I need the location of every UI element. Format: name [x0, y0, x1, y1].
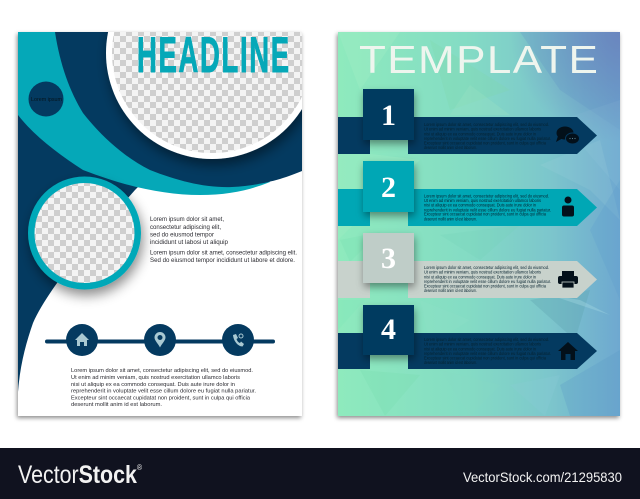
step 4 copy: Lorem ipsum dolor sit amet, consectetur adipiscing elit, sed do eiusmod.: [424, 337, 549, 342]
teal arc: [18, 32, 270, 195]
navy arc: [55, 32, 302, 187]
step 1: [338, 89, 597, 154]
step 1 copy: deserunt mollit anim id est laborum.: [424, 145, 477, 150]
step 2 copy: [424, 193, 551, 221]
text block: intro: consectetur adipiscing elit,: [150, 224, 221, 231]
text block: footer copy: reprehenderit in voluptate velit esse cillum dolore eu fugiat nulla pariatur.: [71, 388, 256, 394]
step 1 copy: [424, 122, 551, 150]
step 4 copy: Ut enim ad minim veniam, quis nostrud exercitation ullamco laboris: [424, 342, 542, 347]
step 4: 4: [381, 313, 396, 346]
icon: speech bubbles: [556, 126, 580, 144]
text block: footer copy: nisi ut aliquip ex ea commodo consequat. Duis aute irure dolor in: [71, 382, 235, 388]
step 2 copy: Ut enim ad minim veniam, quis nostrud exercitation ullamco laboris: [424, 198, 542, 203]
step 3 copy: deserunt mollit anim id est laborum.: [424, 288, 477, 293]
step 1 copy: reprehenderit in voluptate velit esse cillum dolore eu fugiat nulla pariatur.: [424, 136, 551, 141]
step 3 copy: nisi ut aliquip ex ea commodo consequat. Duis aute irure dolor in: [424, 274, 536, 279]
step 1 copy: Ut enim ad minim veniam, quis nostrud exercitation ullamco laboris: [424, 127, 542, 132]
large photo placeholder circle: [103, 32, 302, 170]
step 4 copy: deserunt mollit anim id est laborum.: [424, 360, 477, 365]
step 2 copy: nisi ut aliquip ex ea commodo consequat. Duis aute irure dolor in: [424, 203, 536, 208]
contact timeline bar: [45, 324, 275, 356]
step 3 copy: Lorem ipsum dolor sit amet, consectetur adipiscing elit, sed do eiusmod.: [424, 265, 549, 270]
text block: intro: Sed do eiusmod tempor incididunt ut labore et dolore.: [150, 257, 295, 264]
panel: left flyer page: [18, 0, 318, 416]
small navy badge: [28, 82, 64, 116]
step 1 copy: nisi ut aliquip ex ea commodo consequat. Duis aute irure dolor in: [424, 131, 536, 136]
headline: HEADLINE: [137, 26, 291, 83]
step 2 copy: Excepteur sint occaecat cupidatat non proident, sunt in culpa qui officia: [424, 212, 546, 217]
text block: footer copy: Ut enim ad minim veniam, quis nostrud exercitation ullamco laboris: [71, 375, 240, 381]
step 2 copy: reprehenderit in voluptate velit esse cillum dolore eu fugiat nulla pariatur.: [424, 207, 551, 212]
step 4 copy: reprehenderit in voluptate velit esse cillum dolore eu fugiat nulla pariatur.: [424, 351, 551, 356]
icon: person: [562, 196, 574, 216]
step 3: [338, 233, 597, 298]
stock image id: VectorStock.com/21295830: [463, 469, 622, 485]
logo wordmark: VectorStock: [18, 461, 147, 489]
step 2: 2: [381, 171, 396, 204]
small navy badge: Lorem ipsum: [31, 97, 62, 103]
text block: intro: sed do eiusmod tempor: [150, 232, 215, 238]
text block: footer copy: [71, 368, 256, 408]
step 3: 3: [381, 242, 396, 275]
step 1: 1: [381, 99, 396, 132]
panel: right template page: [338, 32, 620, 416]
text block: intro: Lorem ipsum dolor sit amet,: [150, 216, 224, 223]
step 3 copy: reprehenderit in voluptate velit esse cillum dolore eu fugiat nulla pariatur.: [424, 279, 551, 284]
icon: location pin: [144, 324, 176, 356]
step 2: [338, 161, 597, 226]
step 4 copy: [424, 337, 551, 365]
step 3 copy: Excepteur sint occaecat cupidatat non proident, sunt in culpa qui officia: [424, 284, 546, 288]
icon: home: [66, 324, 98, 356]
text block: intro: Lorem ipsum dolor sit amet, consectetur adipiscing elit.: [150, 250, 297, 256]
text block: footer copy: Lorem ipsum dolor sit amet, consectetur adipiscing elit, sed do eiusmod.: [71, 368, 253, 374]
text block: footer copy: Excepteur sint occaecat cupidatat non proident, sunt in culpa qui officia: [71, 396, 251, 402]
text block: intro: incididunt ut labosi ut aliquip: [150, 239, 228, 246]
title: template: TEMPLATE: [359, 37, 599, 81]
step 2 copy: deserunt mollit anim id est laborum.: [424, 216, 477, 221]
icon: house: [558, 342, 578, 360]
step 3 copy: Ut enim ad minim veniam, quis nostrud exercitation ullamco laboris: [424, 270, 542, 275]
step 2 copy: Lorem ipsum dolor sit amet, consectetur adipiscing elit, sed do eiusmod.: [424, 193, 549, 198]
step 3 copy: [424, 265, 551, 293]
step 4: [338, 305, 597, 369]
navy lower-left swoosh: [18, 115, 138, 392]
icon: phone: [222, 324, 254, 356]
text block: footer copy: deserunt mollit anim id est laborum.: [71, 402, 162, 408]
footer band: [0, 448, 640, 499]
step 1 copy: Excepteur sint occaecat cupidatat non proident, sunt in culpa qui officia: [424, 140, 546, 146]
small photo placeholder circle: [28, 176, 141, 290]
low-poly background: [504, 32, 620, 416]
step 4 copy: Excepteur sint occaecat cupidatat non proident, sunt in culpa qui officia: [424, 356, 546, 360]
step 4 copy: nisi ut aliquip ex ea commodo consequat. Duis aute irure dolor in: [424, 346, 536, 351]
text block: intro: [150, 216, 297, 264]
logo wordmark: ®: [137, 463, 142, 472]
step 1 copy: Lorem ipsum dolor sit amet, consectetur adipiscing elit, sed do eiusmod.: [424, 122, 549, 127]
icon: printer: [558, 271, 578, 288]
